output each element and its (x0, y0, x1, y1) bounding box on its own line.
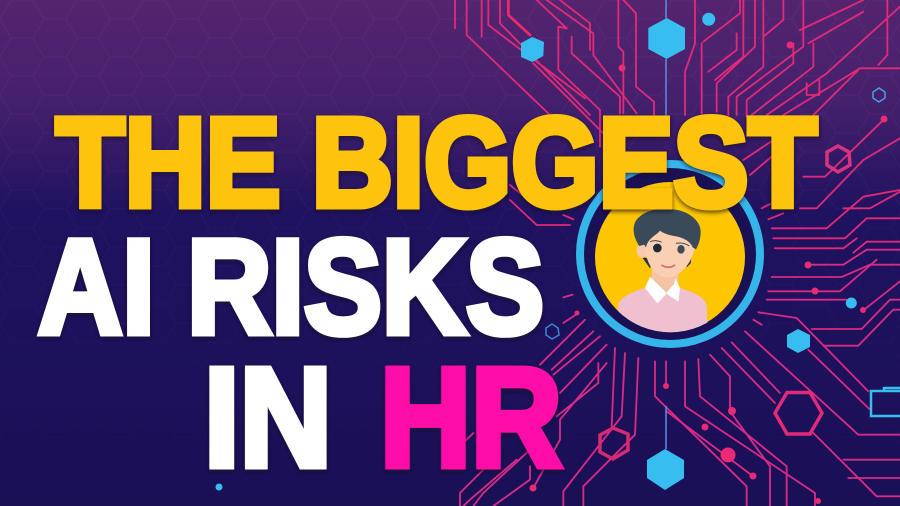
badge yellow disc (595, 182, 745, 332)
circuit nodes (530, 42, 888, 504)
collar (645, 277, 680, 303)
hair (634, 209, 701, 249)
title word: HR: HR (380, 338, 562, 496)
right eye (677, 245, 685, 254)
neck (652, 267, 678, 295)
sweater (618, 287, 708, 333)
brows (650, 241, 689, 246)
left eye (653, 244, 662, 252)
title line 3: IN (204, 338, 332, 496)
icon: outlined hexagons (546, 88, 900, 459)
blue vertical connectors (665, 0, 667, 449)
person illustration (618, 209, 708, 333)
icon: blue hexagons (216, 13, 857, 491)
portrait badge (580, 164, 760, 344)
title (38, 92, 817, 496)
mouth (662, 265, 675, 267)
face (646, 230, 695, 278)
ear (636, 244, 646, 258)
title line 2: AI RISKS (38, 213, 544, 362)
circuit traces: bottom right (450, 250, 900, 506)
title line 1: THE BIGGEST (56, 92, 817, 233)
hair back flicks (642, 258, 692, 268)
badge ring (580, 164, 760, 344)
circuit traces: top right (455, 0, 900, 253)
background (0, 0, 900, 328)
